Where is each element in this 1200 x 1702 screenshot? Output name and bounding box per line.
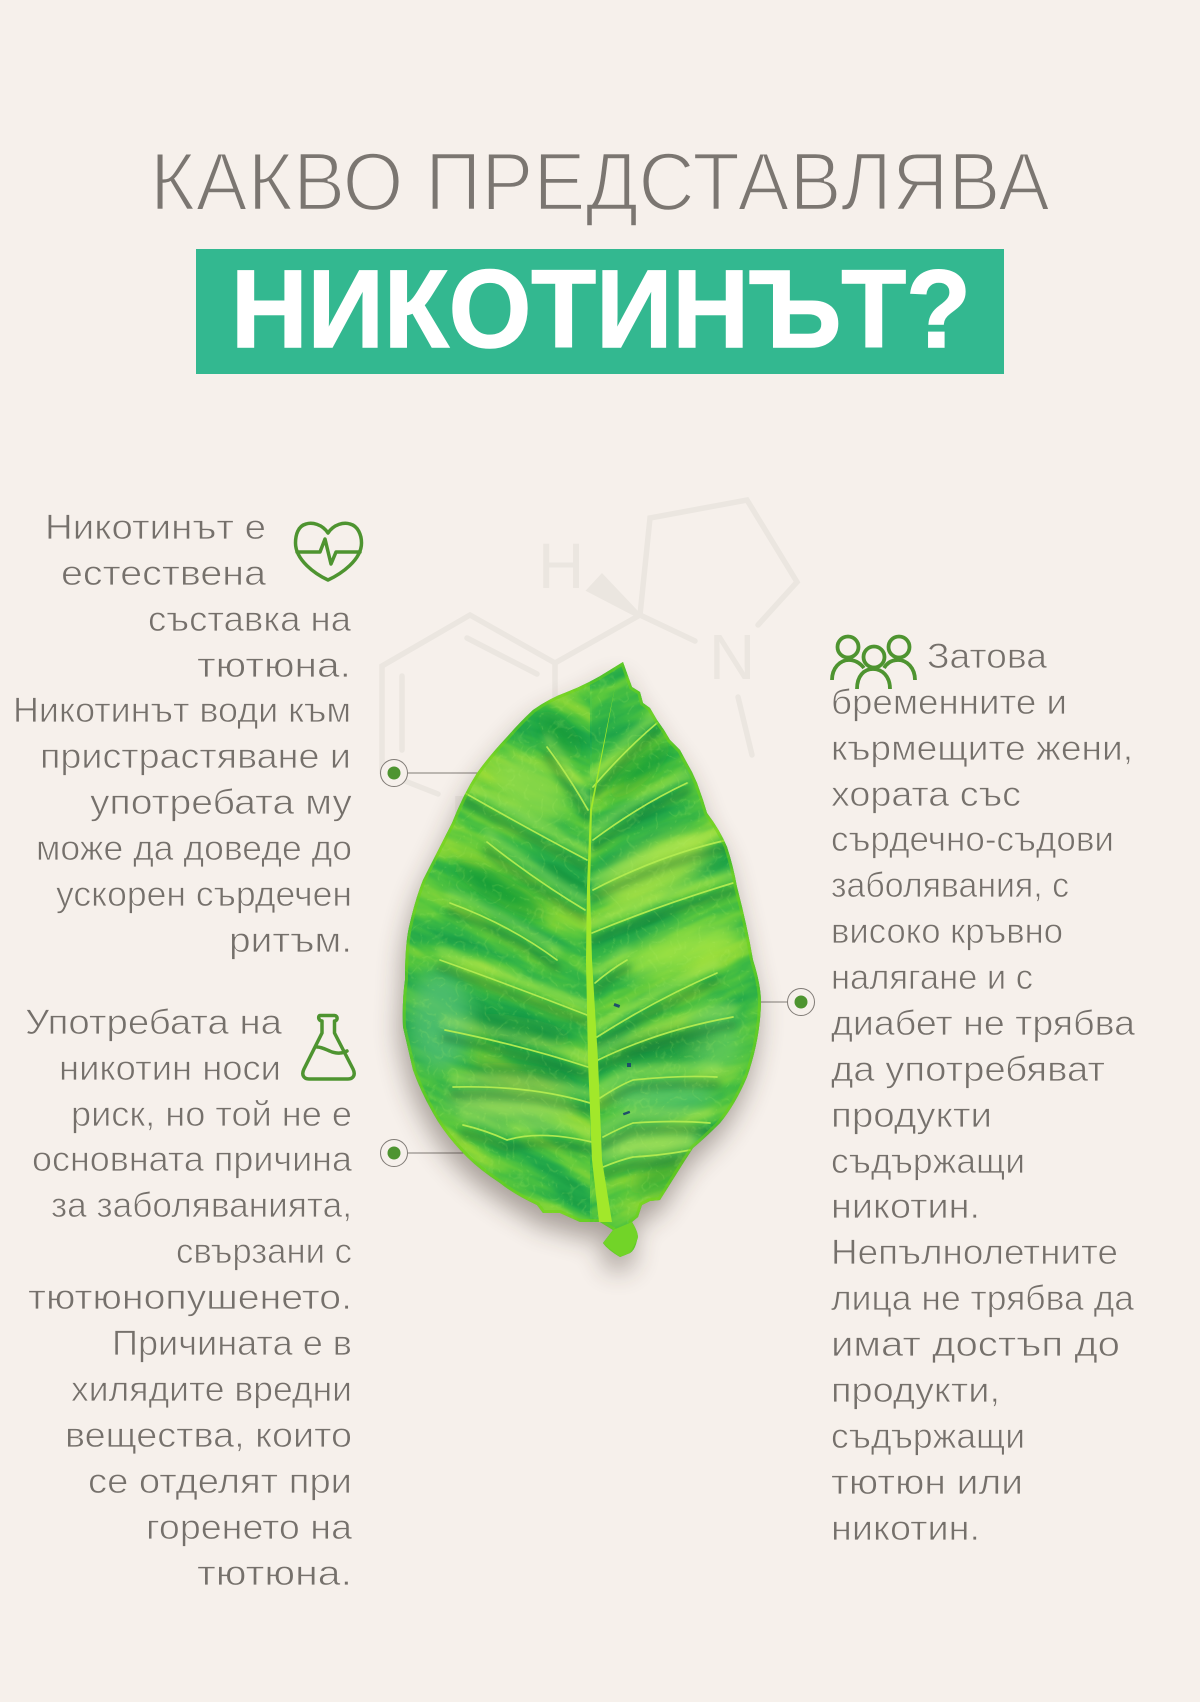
text block: who should avoid nicotine: имат достъп до [831, 1324, 1120, 1364]
icon: heart with pulse [296, 523, 362, 580]
text block: risks of nicotine: за заболяванията, [51, 1185, 352, 1225]
nicotine molecule background: H [538, 530, 584, 602]
infographic page [16, 154, 1135, 1585]
nicotine molecule background: N [450, 782, 496, 854]
text block: nicotine in tobacco: ускорен сърдечен [56, 874, 352, 914]
text block: who should avoid nicotine: диабет не трябва [831, 1003, 1135, 1043]
text block: who should avoid nicotine: никотин. [831, 1186, 980, 1226]
text block: who should avoid nicotine: Непълнолетните [831, 1232, 1118, 1272]
text block: risks of nicotine: основната причина [32, 1139, 352, 1179]
nicotine molecule background: N [709, 621, 755, 693]
text block: who should avoid nicotine: бременните и [831, 682, 1067, 722]
text block: who should avoid nicotine: съдържащи [831, 1141, 1025, 1181]
text block: risks of nicotine: горенето на [146, 1507, 352, 1547]
text block: risks of nicotine: никотин носи [59, 1048, 281, 1088]
text block: who should avoid nicotine [831, 636, 1135, 1548]
text block: nicotine in tobacco: употребата му [90, 782, 352, 822]
text block: who should avoid nicotine: продукти, [831, 1370, 1000, 1410]
text block: who should avoid nicotine: сърдечно-съдови [831, 819, 1114, 859]
text block: who should avoid nicotine: никотин. [831, 1508, 980, 1548]
tobacco leaf [383, 662, 774, 1284]
text block: nicotine in tobacco: съставка на [148, 599, 351, 639]
text block: risks of nicotine: риск, но той не е [71, 1094, 352, 1134]
icon: group of people [832, 636, 915, 689]
text block: who should avoid nicotine: кърмещите жени, [831, 728, 1133, 768]
nicotine molecule background [382, 500, 797, 854]
text block: risks of nicotine: Употребата на [25, 1002, 282, 1042]
text block: nicotine in tobacco: естествена [61, 553, 266, 593]
text block: who should avoid nicotine: налягане и с [831, 957, 1033, 997]
text block: who should avoid nicotine: да употребяват [831, 1049, 1105, 1089]
connector markers [380, 760, 814, 1166]
text block: nicotine in tobacco: ритъм. [229, 920, 352, 960]
text block: risks of nicotine: свързани с [176, 1231, 352, 1271]
text block: nicotine in tobacco: Никотинът е [45, 507, 266, 547]
text block: nicotine in tobacco: Никотинът води към [13, 690, 351, 730]
text block: who should avoid nicotine: съдържащи [831, 1416, 1025, 1456]
text block: who should avoid nicotine: продукти [831, 1095, 992, 1135]
text block: risks of nicotine: вещества, които [65, 1415, 352, 1455]
text block: who should avoid nicotine: тютюн или [831, 1462, 1023, 1502]
text block: risks of nicotine: тютюна. [197, 1553, 352, 1593]
heading banner: НИКОТИНЪТ? [231, 248, 971, 371]
text block: who should avoid nicotine: Затова [927, 636, 1047, 676]
text block: risks of nicotine: се отделят при [88, 1461, 352, 1501]
text block: who should avoid nicotine: лица не трябва да [831, 1278, 1134, 1318]
text block: nicotine in tobacco: тютюна. [197, 645, 351, 685]
text block: nicotine in tobacco: пристрастяване и [40, 736, 351, 776]
text block: risks of nicotine: Причината е в [112, 1323, 352, 1363]
icon: lab flask [303, 1016, 354, 1079]
text block: who should avoid nicotine: заболявания, с [831, 865, 1069, 905]
text block: who should avoid nicotine: хората със [831, 774, 1021, 814]
text block: risks of nicotine [25, 1002, 352, 1593]
text block: risks of nicotine: хилядите вредни [71, 1369, 352, 1409]
text block: who should avoid nicotine: високо кръвно [831, 911, 1063, 951]
text block: nicotine in tobacco: може да доведе до [36, 828, 352, 868]
title line: КАКВО ПРЕДСТАВЛЯВА [150, 135, 1051, 228]
text block: risks of nicotine: тютюнопушенето. [28, 1277, 352, 1317]
text block: nicotine in tobacco [13, 507, 352, 960]
